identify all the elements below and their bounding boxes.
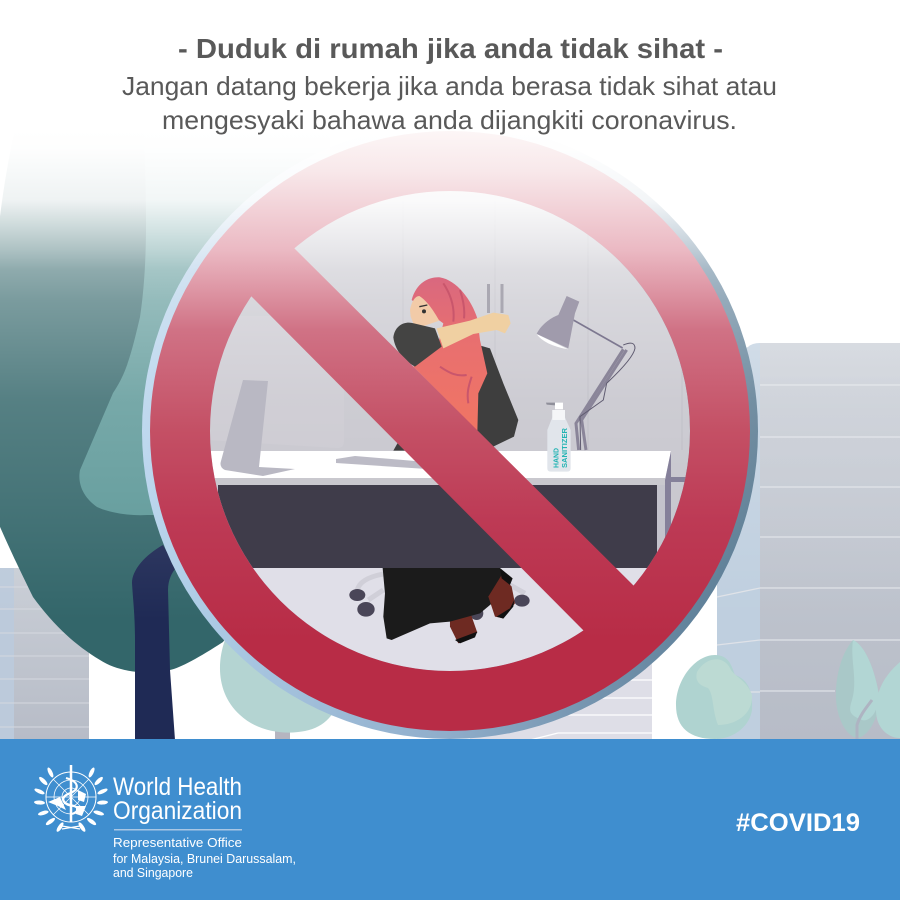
office name: for Malaysia, Brunei Darussalam,: [113, 852, 296, 866]
icon: WHO emblem: [34, 765, 108, 833]
bush right: [676, 655, 752, 739]
sanitizer label: SANITIZER: [560, 427, 569, 468]
left building: [0, 568, 89, 740]
office name: [113, 836, 296, 880]
right building: [717, 343, 900, 740]
far right tree: [876, 662, 900, 738]
title: - Duduk di rumah jika anda tidak sihat -: [178, 33, 723, 64]
organisation name: [113, 773, 242, 825]
hand sanitizer: [546, 403, 571, 472]
organisation name: Organization: [113, 797, 242, 825]
cabinet handles: [488, 284, 502, 313]
prohibition ring and slash: [150, 131, 750, 731]
monitor stand: [220, 380, 295, 476]
description text: [122, 71, 777, 135]
large teal tree: [0, 91, 330, 740]
sanitizer label: HAND: [552, 447, 560, 468]
desk: [205, 451, 695, 570]
footer band: [0, 739, 900, 900]
small round tree: [220, 600, 345, 740]
office name: and Singapore: [113, 866, 193, 880]
description text: mengesyaki bahawa anda dijangkiti coronavirus.: [162, 105, 737, 135]
keyboard: [336, 456, 427, 469]
leaf tree right: [836, 640, 879, 740]
organisation name: World Health: [113, 773, 242, 801]
hashtag: #COVID19: [736, 809, 860, 837]
chair base: [349, 574, 530, 620]
floor: [253, 568, 647, 671]
sanitizer label: [554, 428, 567, 468]
rule under organisation name: [114, 829, 242, 830]
white fade overlay: [0, 0, 900, 620]
room wall and monitor back: [210, 206, 690, 670]
office name: Representative Office: [113, 836, 242, 850]
centre building: [470, 640, 652, 740]
person: [393, 277, 518, 457]
prohibition sign rim: [142, 123, 758, 739]
description text: Jangan datang bekerja jika anda berasa tidak sihat atau: [122, 71, 777, 101]
lamp: [537, 296, 635, 450]
office scene inside sign: [200, 277, 700, 678]
skirt and boots: [383, 568, 515, 643]
